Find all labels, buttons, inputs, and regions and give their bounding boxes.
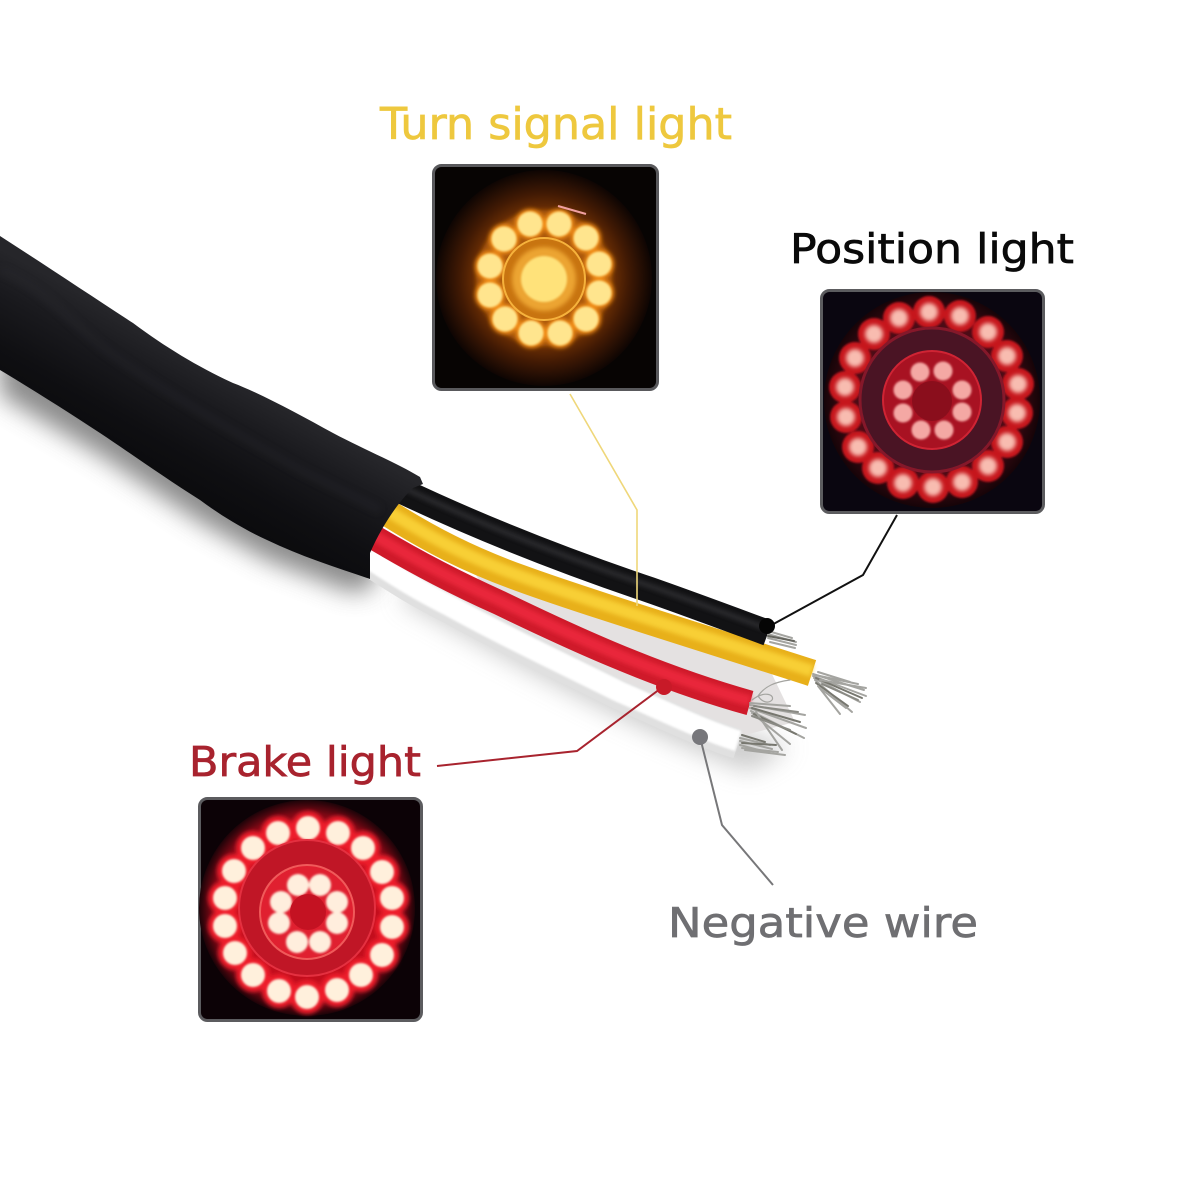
amber centre cluster: [503, 238, 585, 320]
lens glint: [558, 206, 586, 214]
leader line: turn signal: [570, 394, 637, 606]
heading: brake light: Brake light: [189, 738, 421, 786]
outer LED cores: [213, 816, 404, 1009]
white wire strands: [740, 735, 785, 755]
black outer sheath: [0, 236, 423, 579]
panel: brake light: [199, 798, 422, 1020]
middle lens ring: [860, 328, 1004, 472]
yellow wire: [380, 506, 812, 673]
yellow wire strands: [813, 672, 866, 714]
white wire: [355, 549, 738, 744]
inner red disc: [883, 351, 981, 449]
heading: position light: Position light: [790, 225, 1074, 273]
outer LED glow: [208, 811, 409, 1014]
red wire: [365, 530, 750, 703]
outer LED highlights: [836, 303, 1027, 496]
panel: position light: [822, 290, 1044, 512]
amber LED ring: [475, 209, 614, 348]
cable shadow: [0, 340, 380, 592]
exposed copper strands: [740, 631, 866, 755]
black wire: [400, 486, 768, 633]
inner LED ring: [268, 874, 348, 953]
inner disc: [260, 865, 354, 959]
red wire strands: [750, 680, 806, 750]
middle lens ring: [239, 840, 375, 976]
panel: turn signal light: [434, 166, 658, 390]
leader line: negative wire with dot: [692, 729, 773, 885]
leader line: position light with dot: [759, 515, 897, 634]
heading: turn signal light: Turn signal light: [379, 99, 732, 150]
black wire strands: [768, 631, 796, 648]
wire end shadow: [400, 575, 790, 772]
inner LED ring: [894, 362, 972, 440]
outer red LED ring glow: [829, 296, 1034, 503]
heading: negative wire: Negative wire: [668, 899, 978, 947]
leader line: brake light with dot: [437, 679, 672, 766]
gray gap between wires: [470, 565, 795, 735]
